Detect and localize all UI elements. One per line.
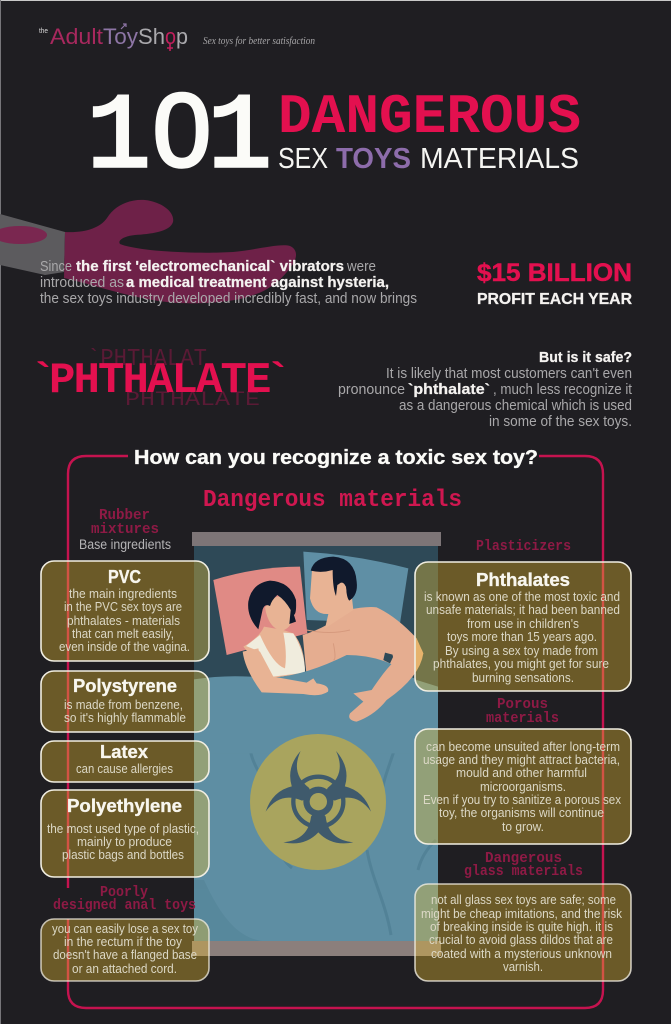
card: PVC: in the PVC sex toys are	[64, 599, 182, 614]
couple figures	[194, 552, 438, 753]
stat: 15 billion profit: $15 BILLION	[477, 259, 632, 287]
title	[87, 73, 581, 198]
intro paragraph: the first 'electromechanical` vibrators	[76, 259, 344, 275]
card: porous materials: can become unsuited after long-term	[426, 739, 620, 754]
card: porous materials	[415, 729, 631, 844]
card: polystyrene: Polystyrene	[73, 676, 177, 696]
card: phthalates: By using a sex toy made from	[445, 643, 598, 658]
paragraph: but is it safe	[338, 350, 632, 430]
card: porous materials: Even if you try to sanitize a porous sex	[423, 792, 621, 807]
illustration: couple in bed	[192, 532, 441, 956]
card: latex: can cause allergies	[76, 761, 173, 776]
card: dangerous glass: might be cheap imitations, and the risk	[421, 906, 622, 921]
card: latex: Latex	[100, 742, 148, 762]
logo: the Adult Toy Shop: Adult	[50, 24, 103, 49]
card: porous materials: usage and they might attract bacteria,	[423, 752, 620, 767]
illustration: vibrator	[0, 200, 296, 303]
label: rubber mixtures: Base ingredients	[79, 537, 171, 552]
card: polystyrene: is made from benzene,	[64, 697, 183, 712]
card: dangerous glass: varnish.	[503, 959, 543, 974]
card: polyethylene: Polyethylene	[67, 796, 182, 816]
blanket wrinkles	[194, 738, 436, 941]
label: dangerous glass materials: Dangerous	[485, 850, 562, 867]
card: dangerous glass: coated with a mysterious unknown	[431, 946, 612, 961]
card: polyethylene	[41, 790, 209, 877]
card: anal toys: or an attached cord.	[72, 961, 177, 976]
phthalate word art: `PHTHALAT	[87, 346, 207, 373]
logo: the Adult Toy Shop: Sh	[138, 24, 165, 49]
card: anal toys	[41, 919, 209, 981]
paragraph: but is it safe: It is likely that most customers can't even	[386, 366, 632, 382]
card: dangerous glass: crucial to avoid glass dildos that are	[429, 932, 613, 947]
card: dangerous glass: of breaking inside is quite high. it is	[430, 919, 613, 934]
section heading: How can you recognize a toxic sex toy?	[134, 447, 538, 469]
title line SEX TOYS MATERIALS	[278, 143, 579, 175]
pink frame	[68, 456, 603, 1008]
label: plasticizers: Plasticizers	[476, 538, 571, 555]
title number 101: 1	[87, 78, 151, 198]
card: porous materials: to grow.	[502, 819, 544, 834]
card: dangerous glass	[415, 884, 631, 981]
label: poorly designed anal toys	[53, 884, 196, 914]
foot board	[192, 941, 441, 956]
card: dangerous glass: not all glass sex toys are safe; some	[431, 892, 616, 907]
title number 101: 0	[153, 73, 211, 189]
card: phthalates: phthalates, you might get for sure	[433, 656, 609, 671]
label: poorly designed anal toys: designed anal toys	[53, 897, 196, 914]
intro paragraph: a medical treatment against hysteria,	[126, 275, 389, 291]
card: anal toys: in the rectum if the toy	[64, 934, 182, 949]
logo: the Adult Toy Shop: o	[165, 24, 176, 49]
label: porous materials	[486, 696, 559, 727]
card: porous materials: toy, the organisms will continue	[439, 805, 604, 820]
paragraph: but is it safe: pronounce	[338, 382, 405, 398]
card: anal toys: you can easily lose a sex toy	[52, 921, 198, 936]
phthalate word art: `PHTHALATE`	[30, 356, 291, 406]
card: PVC: PVC	[108, 567, 141, 587]
stat: 15 billion profit	[477, 259, 632, 308]
bed sheet	[194, 546, 438, 706]
label: poorly designed anal toys: Poorly	[100, 884, 148, 901]
card: phthalates: from use in children's	[467, 616, 579, 631]
card: phthalates: burning sensations.	[472, 670, 574, 685]
intro paragraph	[40, 259, 417, 307]
card: polystyrene	[41, 671, 209, 732]
card: phthalates: unsafe materials; it had been banned	[426, 602, 620, 617]
paragraph: but is it safe: as a dangerous chemical which is used	[399, 398, 632, 414]
card: PVC: the main ingredients	[69, 586, 177, 601]
card: latex	[41, 741, 209, 782]
title line SEX TOYS MATERIALS: SEX	[278, 143, 328, 175]
subheading: dangerous materials: Dangerous materials	[203, 487, 462, 514]
label: rubber mixtures	[79, 507, 171, 552]
title word DANGEROUS: DANGEROUS	[278, 85, 581, 149]
card: polystyrene: so it's highly flammable	[64, 710, 186, 725]
label: porous materials: materials	[486, 710, 559, 727]
card: polyethylene: mainly to produce	[77, 834, 172, 849]
bed headboard	[192, 532, 441, 546]
paragraph: but is it safe: `phthalate`	[408, 382, 490, 398]
card: phthalates: Phthalates	[476, 570, 570, 590]
label: rubber mixtures: mixtures	[91, 521, 159, 538]
icon: biohazard	[250, 734, 386, 870]
card: PVC: that can melt easily,	[72, 626, 174, 641]
card: anal toys: doesn't have a flanged base	[53, 947, 197, 962]
card: porous materials: microorganisms.	[480, 779, 566, 794]
label: dangerous glass materials	[464, 850, 583, 880]
card: phthalates	[415, 562, 631, 691]
label: rubber mixtures: Rubber	[99, 507, 150, 524]
paragraph: but is it safe: in some of the sex toys.	[489, 414, 632, 430]
intro paragraph: introduced as	[40, 275, 124, 291]
label: porous materials: Porous	[497, 696, 548, 713]
logo: the Adult Toy Shop: Toy	[103, 24, 138, 49]
phthalate word art: PHTHALATE	[125, 389, 260, 412]
card: polyethylene: the most used type of plastic,	[47, 821, 199, 836]
blanket lower	[194, 700, 438, 941]
intro paragraph: the sex toys industry developed incredibly fast, and now brings	[40, 291, 417, 307]
tagline: Sex toys for better satisfaction	[203, 36, 315, 47]
logo: the Adult Toy Shop	[39, 24, 188, 51]
paragraph: but is it safe: , much less recognize it	[493, 382, 632, 398]
title line SEX TOYS MATERIALS: TOYS	[336, 143, 411, 175]
card: phthalates: is known as one of the most toxic and	[424, 589, 620, 604]
logo: the Adult Toy Shop: the	[39, 28, 48, 35]
title number 101: 1	[208, 78, 272, 198]
card: PVC: even inside of the vagina.	[59, 639, 190, 654]
card: polyethylene: plastic bags and bottles	[62, 847, 184, 862]
card: phthalates: toys more than 15 years ago.	[447, 629, 597, 644]
stat: 15 billion profit: PROFIT EACH YEAR	[477, 291, 632, 308]
intro paragraph: Since	[40, 259, 72, 275]
paragraph: but is it safe: But is it safe?	[539, 350, 632, 366]
card: porous materials: mould and other harmful	[456, 765, 587, 780]
label: dangerous glass materials: glass materials	[464, 863, 583, 880]
logo: the Adult Toy Shop: p	[176, 24, 188, 49]
intro paragraph: were	[346, 259, 376, 275]
card: PVC	[41, 561, 209, 661]
title line SEX TOYS MATERIALS: MATERIALS	[420, 143, 579, 175]
card: PVC: phthalates - materials	[67, 613, 180, 628]
